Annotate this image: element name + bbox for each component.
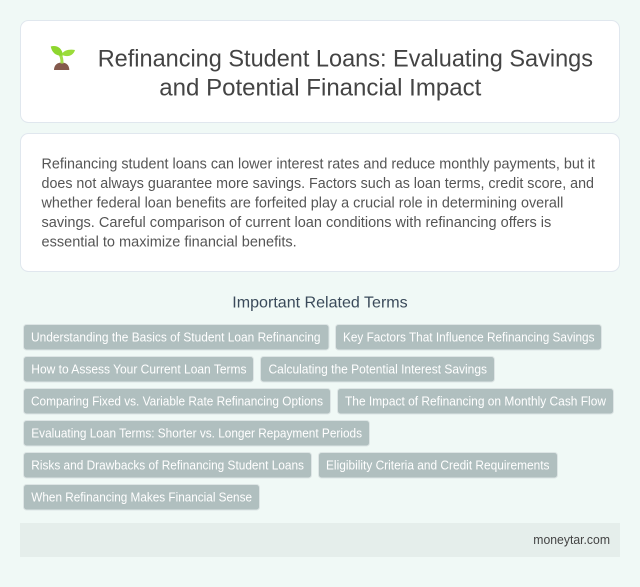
- tag: [24, 484, 260, 510]
- summary text: savings. Careful comparison of current loan conditions with refinancing offers is: [42, 215, 551, 231]
- summary text: essential to maximize financial benefits.: [42, 234, 297, 250]
- icon: seedling: [51, 46, 75, 70]
- tag: Eligibility Criteria and Credit Requirements: [326, 459, 550, 473]
- summary text: Refinancing student loans can lower interest rates and reduce monthly payments, but it: [42, 156, 595, 172]
- footer bar: [20, 523, 620, 557]
- footer site name: moneytar.com: [533, 533, 610, 547]
- panel: summary card: [20, 134, 620, 272]
- tag: [336, 324, 602, 350]
- title: and Potential Financial Impact: [159, 74, 482, 102]
- tag: [24, 388, 330, 414]
- tag: [24, 420, 370, 446]
- tag: Evaluating Loan Terms: Shorter vs. Longer Repayment Periods: [31, 427, 362, 441]
- tag: [338, 388, 614, 414]
- title: Refinancing Student Loans: Evaluating Savings: [98, 46, 593, 72]
- tag: [318, 452, 558, 478]
- summary text: whether federal loan benefits are forfeited play a crucial role in determining overall: [41, 195, 563, 211]
- tag: [260, 356, 494, 382]
- tag: Risks and Drawbacks of Refinancing Student Loans: [31, 459, 304, 473]
- heading: important related terms: Important Related Terms: [232, 294, 408, 311]
- tag: [24, 356, 254, 382]
- tag: How to Assess Your Current Loan Terms: [31, 363, 246, 377]
- tag: Key Factors That Influence Refinancing Savings: [343, 331, 594, 345]
- tag: The Impact of Refinancing on Monthly Cash Flow: [345, 395, 607, 409]
- tag: Comparing Fixed vs. Variable Rate Refinancing Options: [31, 395, 323, 409]
- title: [98, 46, 593, 102]
- tag: Calculating the Potential Interest Savings: [268, 363, 487, 377]
- tag: When Refinancing Makes Financial Sense: [31, 491, 252, 505]
- tag: [24, 452, 312, 478]
- summary text: [41, 156, 595, 250]
- tag: [24, 324, 329, 350]
- tag: Understanding the Basics of Student Loan Refinancing: [31, 331, 320, 345]
- summary text: does not always guarantee more savings. Factors such as loan terms, credit score, and: [42, 176, 594, 192]
- tag list: [24, 324, 614, 510]
- panel: title card: [20, 20, 620, 122]
